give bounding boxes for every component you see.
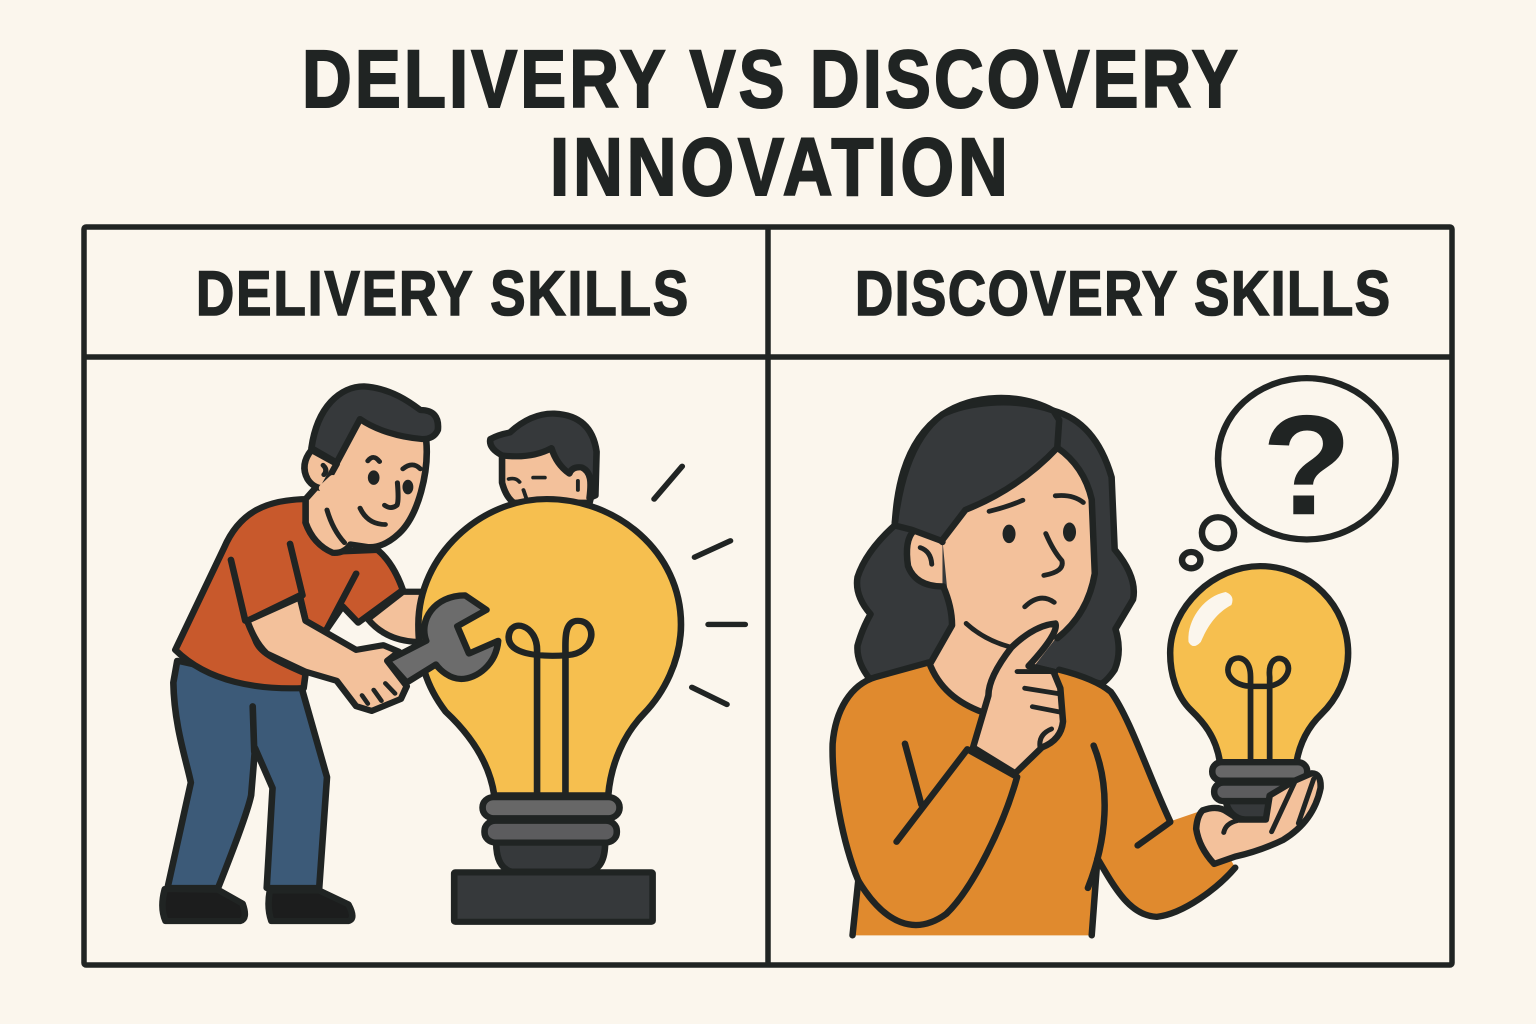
panel: discovery illustration — [833, 378, 1396, 935]
big light bulb — [418, 499, 681, 922]
woman's raised hand — [973, 623, 1063, 773]
shirt — [175, 499, 403, 688]
bulb stand — [454, 872, 653, 922]
shoes — [162, 889, 352, 921]
title: DELIVERY VS DISCOVERY — [302, 33, 1238, 125]
second man behind bulb — [490, 414, 597, 503]
neck — [929, 588, 1057, 712]
sweater fold lines — [858, 744, 1170, 925]
trousers — [168, 661, 327, 888]
heading: discovery skills: DISCOVERY SKILLS — [855, 259, 1390, 329]
thought bubbles — [1182, 378, 1396, 568]
ear — [907, 530, 942, 586]
front hair fringe — [895, 402, 1059, 541]
heading: delivery skills: DELIVERY SKILLS — [196, 259, 688, 329]
face — [942, 448, 1095, 648]
question mark: ? — [1262, 386, 1352, 545]
bulb screw base — [496, 843, 605, 872]
title — [302, 33, 1238, 213]
orange sweater — [833, 662, 1235, 935]
panel: delivery illustration — [162, 386, 745, 922]
back arm — [368, 592, 422, 642]
small light bulb — [1170, 566, 1348, 820]
title: INNOVATION — [550, 121, 1008, 213]
front arm and hand — [247, 597, 407, 711]
woman's hair — [857, 398, 1134, 684]
shine rays — [654, 466, 745, 704]
hand holding bulb — [1196, 773, 1321, 864]
neck and face — [304, 386, 438, 553]
facial features — [920, 495, 1083, 647]
wrench — [387, 595, 498, 683]
comparison table frame — [84, 227, 1452, 965]
